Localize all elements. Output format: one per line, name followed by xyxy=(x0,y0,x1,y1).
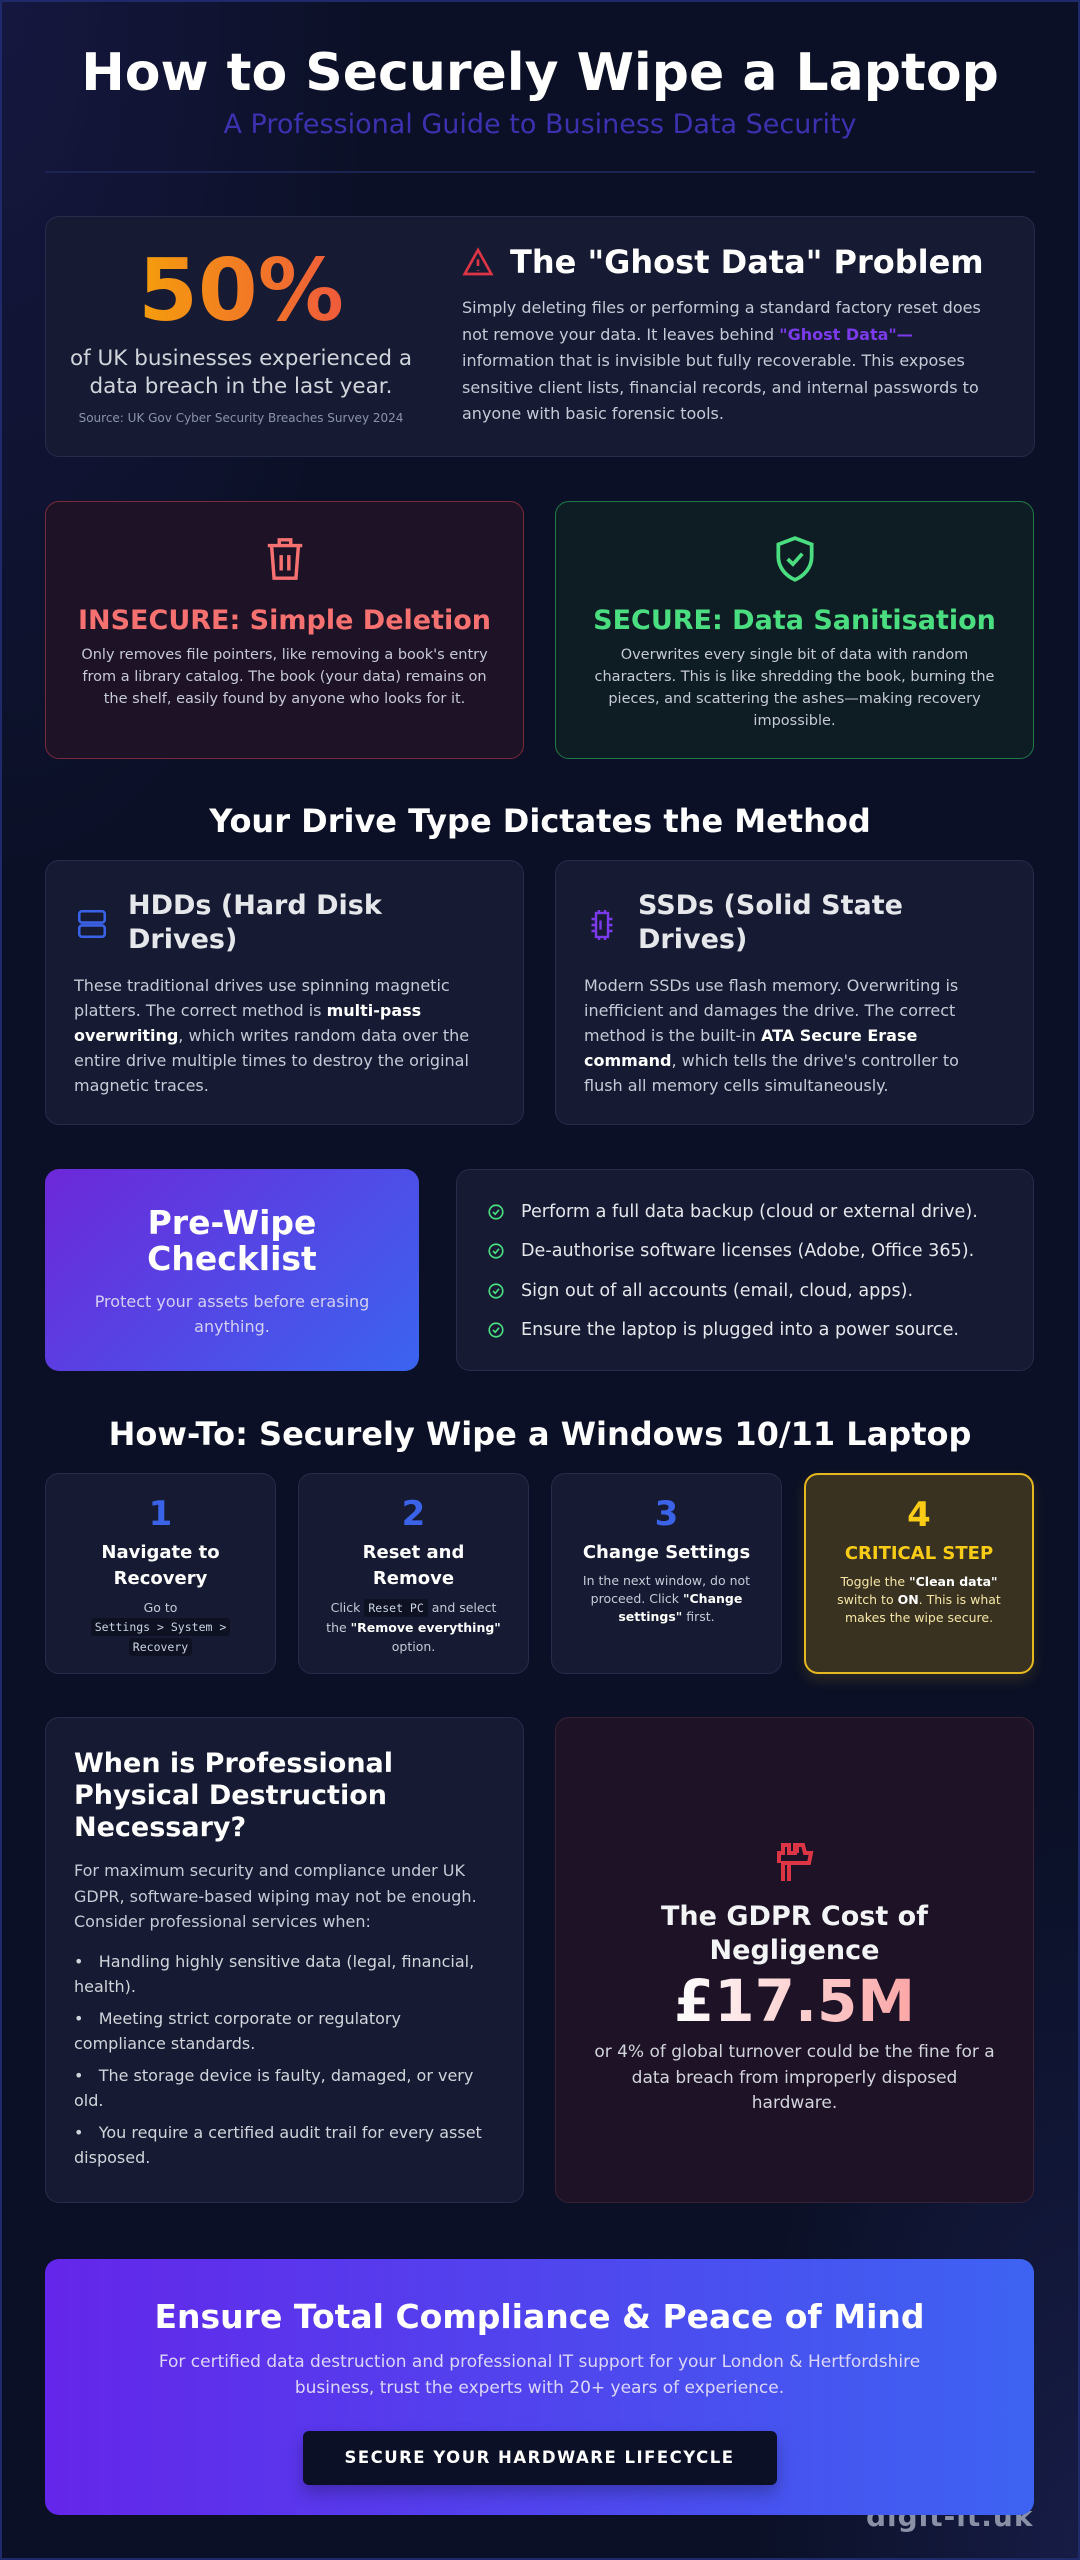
panel: insecure xyxy=(45,501,524,759)
step 1: Recovery xyxy=(133,1640,188,1654)
panel: GDPR cost xyxy=(555,1717,1034,2203)
panel: SSD xyxy=(555,860,1034,1125)
panel: physical destruction: When is Professional Physical Destruction Necessary? xyxy=(74,1748,393,1843)
panel: pre-wipe checklist header: Pre-Wipe Checklist xyxy=(147,1203,317,1278)
panel: physical destruction xyxy=(45,1717,524,2203)
panel: HDD xyxy=(45,860,524,1125)
stat: 50%: Source: UK Gov Cyber Security Breaches Survey 2024 xyxy=(79,411,403,425)
heading with warning icon: The "Ghost Data" Problem xyxy=(510,243,984,281)
checklist item: Sign out of all accounts (email, cloud, apps). xyxy=(521,1281,913,1301)
icon: server xyxy=(78,910,106,938)
bullet list: • Handling highly sensitive data (legal, financial, health). xyxy=(74,1952,474,1996)
watermark: digit-it.uk xyxy=(866,2500,1033,2533)
ghost data text xyxy=(462,243,984,423)
subtitle: A Professional Guide to Business Data Security xyxy=(223,109,857,140)
panel: pre-wipe checklist header: Protect your assets before erasing anything. xyxy=(95,1292,369,1336)
panel: checklist items xyxy=(456,1169,1034,1371)
step 2: Click Reset PC and select the "Remove everything" option. xyxy=(326,1600,501,1654)
ghost data text: Simply deleting files or performing a standard factory reset does not remove your data. It leaves behind "Ghost Data"— information that is invisible but fully recoverable. This exposes sensitive client lists, financial records, and internal passwords to anyone with basic forensic tools. xyxy=(462,298,981,423)
bullet list: • The storage device is faulty, damaged, or very old. xyxy=(74,2066,473,2110)
step 4: critical xyxy=(804,1473,1034,1674)
heading: drive type: Your Drive Type Dictates the Method xyxy=(209,802,871,840)
step 3: In the next window, do not proceed. Click "Change settings" first. xyxy=(583,1573,750,1624)
bullet list xyxy=(74,1952,482,2167)
step 4: critical: CRITICAL STEP xyxy=(845,1543,993,1564)
panel: SSD: Modern SSDs use flash memory. Overwriting is inefficient and damages the drive. The correct method is the built-in ATA Secure Erase command, which tells the drive's controller to flush all memory cells simultaneously. xyxy=(584,976,959,1095)
panel: HDD: These traditional drives use spinning magnetic platters. The correct method is multi-pass overwriting, which writes random data over the entire drive multiple times to destroy the original magnetic traces. xyxy=(74,976,469,1095)
step 1: Go to xyxy=(144,1600,177,1615)
icon: fist xyxy=(777,1843,814,1881)
panel: GDPR cost: The GDPR Cost of Negligence xyxy=(661,1901,928,1966)
step 3: 3 xyxy=(655,1494,678,1534)
step 1: Navigate to Recovery xyxy=(101,1542,220,1589)
panel: ghost data xyxy=(45,216,1035,457)
step 3: Change Settings xyxy=(583,1542,750,1563)
icon: chip xyxy=(592,910,612,940)
panel: secure: SECURE: Data Sanitisation xyxy=(593,605,996,636)
step 2: Reset and Remove xyxy=(363,1542,464,1589)
step 1: 1 xyxy=(149,1494,172,1534)
title: How to Securely Wipe a Laptop xyxy=(81,43,999,103)
checklist item: De-authorise software licenses (Adobe, Office 365). xyxy=(521,1241,974,1261)
CTA button: SECURE YOUR HARDWARE LIFECYCLE xyxy=(344,2448,735,2467)
icon: trash xyxy=(268,538,302,580)
stat: 50% xyxy=(70,241,412,425)
step 2: 2 xyxy=(402,1494,425,1534)
checklist item: Perform a full data backup (cloud or external drive). xyxy=(521,1202,978,1222)
CTA panel: Ensure Total Compliance & Peace of Mind xyxy=(154,2297,924,2336)
CTA button xyxy=(302,2431,776,2485)
bullet list: • Meeting strict corporate or regulatory compliance standards. xyxy=(74,2008,401,2053)
CTA panel xyxy=(45,2259,1034,2515)
checklist item: Ensure the laptop is plugged into a power source. xyxy=(521,1320,959,1340)
step 2 xyxy=(298,1473,529,1674)
icon: shield xyxy=(776,536,814,582)
step 1 xyxy=(45,1473,276,1674)
panel: secure: Overwrites every single bit of data with random characters. This is like shredding the book, burning the pieces, and scattering the ashes—making recovery impossible. xyxy=(595,647,994,729)
panel: GDPR cost: £17.5M xyxy=(674,1967,915,2035)
heading: how-to: How-To: Securely Wipe a Windows 10/11 Laptop xyxy=(109,1415,971,1453)
panel: pre-wipe checklist header xyxy=(45,1169,419,1371)
step 1: Settings > System > xyxy=(95,1620,226,1634)
CTA panel: For certified data destruction and professional IT support for your London & Hertfordshire business, trust the experts with 20+ years of experience. xyxy=(159,2352,920,2398)
panel: GDPR cost: or 4% of global turnover could be the fine for a data breach from improperly disposed hardware. xyxy=(594,2042,995,2113)
step 4: critical: Toggle the "Clean data" switch to ON. This is what makes the wipe secure. xyxy=(837,1574,1001,1625)
panel: HDD: HDDs (Hard Disk Drives) xyxy=(128,890,382,955)
panel: insecure: Only removes file pointers, like removing a book's entry from a library catalog. The book (your data) remains on the shelf, easily found by anyone who looks for it. xyxy=(81,647,488,707)
bullet list: • You require a certified audit trail for every asset disposed. xyxy=(74,2122,482,2167)
panel: SSD: SSDs (Solid State Drives) xyxy=(638,890,903,955)
panel: physical destruction: For maximum security and compliance under UK GDPR, software-based wiping may not be enough. Consider professional services when: xyxy=(74,1861,477,1931)
panel: insecure: INSECURE: Simple Deletion xyxy=(78,605,491,636)
stat: 50%: 50% xyxy=(138,241,344,341)
step 3 xyxy=(551,1473,782,1674)
panel: secure xyxy=(555,501,1034,759)
step 4: critical: 4 xyxy=(907,1495,931,1535)
stat: 50%: of UK businesses experienced a data breach in the last year. xyxy=(70,346,412,399)
